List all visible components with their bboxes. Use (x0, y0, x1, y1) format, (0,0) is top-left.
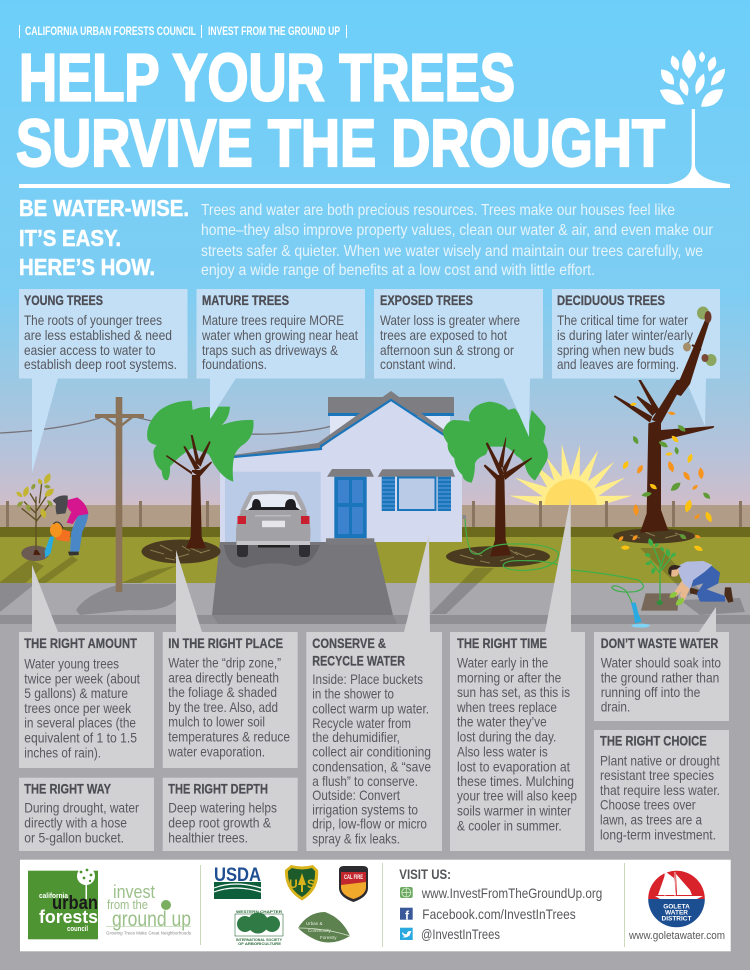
woman (45, 495, 88, 558)
body: temperatures & reduce (168, 729, 290, 745)
man (668, 561, 733, 607)
body: long-term investment. (600, 826, 716, 842)
body (601, 654, 721, 715)
body: collect warm up water. (312, 700, 429, 716)
body: traps such as driveways & (202, 342, 339, 358)
body: equivalent of 1 to 1.5 (24, 729, 137, 745)
scene: exposed tree (443, 402, 548, 557)
body (24, 656, 140, 760)
foliage (147, 401, 254, 482)
subheading (19, 195, 189, 280)
heading: VISIT US: (399, 866, 451, 882)
footer panel (20, 860, 731, 951)
title: HELP YOUR TREES (19, 40, 515, 116)
body: in the shower to (312, 686, 394, 702)
scene: garden hose and spigot (463, 515, 643, 604)
top label (19, 25, 347, 38)
body: a flush” to conserve. (312, 773, 418, 789)
logo: California Urban Forests Council: california (39, 893, 68, 900)
trunk (484, 437, 532, 557)
scene: deciduous tree (614, 380, 714, 552)
logo: Western Chapter ISA (235, 910, 283, 946)
heading: RECYCLE WATER (312, 653, 405, 668)
body: the dehumidifier, (312, 729, 400, 745)
body: resistant tree species (600, 767, 714, 783)
logo: Western Chapter ISA: INTERNATIONAL SOCIETY (236, 938, 283, 942)
body: 5 gallons) & mature (24, 685, 128, 701)
panel: mature trees (196, 289, 365, 419)
body: During drought, water (24, 800, 139, 816)
logo: Western Chapter ISA: WESTERN CHAPTER (236, 910, 283, 914)
logo: Cal Fire (339, 866, 368, 902)
logo: Forest Service shield (285, 865, 318, 900)
body: inches of rain). (24, 744, 101, 760)
panel: the right time (450, 497, 585, 851)
body (201, 312, 358, 372)
body: Water early in the (457, 654, 548, 670)
logo: Forest Service shield: S (307, 877, 315, 891)
scene: sidewalk and curb (0, 583, 750, 970)
logo: Invest from the Ground Up (106, 882, 192, 936)
logo: USDA (214, 865, 261, 899)
pointer (32, 378, 58, 473)
scene: ground shadows (0, 548, 745, 615)
car shadow (224, 545, 320, 568)
icon: deciduous branch with buds overlapping panel (669, 306, 716, 396)
body: or 5-gallon bucket. (24, 829, 124, 845)
body: the water they’ve (457, 714, 547, 730)
body: water when growing near heat (201, 327, 358, 343)
heading: THE RIGHT TIME (457, 636, 547, 651)
body: are less established & need (24, 327, 172, 343)
scene: driveway (212, 540, 397, 624)
window with shutters (378, 469, 455, 511)
scene: house (220, 391, 462, 545)
intro paragraph: Trees and water are both precious resources. Trees make our houses feel like (201, 202, 675, 219)
scene: sun (510, 444, 632, 505)
heading: THE RIGHT DEPTH (168, 781, 268, 796)
body: area directly beneath (168, 669, 279, 685)
panel: conserve and recycle water (306, 533, 442, 851)
body: lost during the day. (457, 729, 556, 745)
body: and leaves are forming. (557, 356, 679, 372)
pointer (210, 378, 236, 419)
top label: CALIFORNIA URBAN FORESTS COUNCIL (25, 26, 196, 38)
body: Water loss is greater where (380, 312, 520, 328)
body: establish deep root systems. (24, 356, 177, 372)
scene: fence (0, 501, 750, 530)
heading: THE RIGHT CHOICE (600, 734, 707, 749)
body: mulch to lower soil (168, 714, 265, 730)
falling leaves (621, 402, 714, 552)
tail lights (238, 516, 310, 524)
cabin (240, 491, 307, 512)
body: lost to evaporation at (457, 758, 570, 774)
logo: Goleta Water District (628, 868, 725, 942)
logo: USDA: USDA (214, 865, 261, 886)
trunk and lower branches (614, 380, 714, 533)
body: morning or after the (457, 669, 561, 685)
body: condensation, & “save (312, 758, 431, 774)
body (456, 654, 577, 833)
body (168, 800, 277, 845)
body: the foliage & shaded (168, 684, 277, 700)
heading: IN THE RIGHT PLACE (168, 636, 283, 651)
logo: Cal Fire: CAL FIRE (344, 875, 363, 881)
body: Recycle water from (312, 715, 411, 731)
scene: mature tree mulch (142, 540, 220, 564)
body: Water the “drip zone,” (168, 654, 281, 670)
body: Also less water is (457, 743, 548, 759)
panel: in the right place (163, 550, 298, 768)
sapling (15, 472, 56, 555)
logo: Goleta Water District: GOLETA (663, 903, 690, 910)
logo: California Urban Forests Council: urban (52, 893, 98, 914)
logo: Urban and Community Forestry leaf (298, 912, 350, 943)
body: Inside: Place buckets (312, 671, 423, 687)
pointer (32, 565, 58, 632)
garage opening (225, 472, 321, 542)
body: & cooler in summer. (457, 817, 562, 833)
panel: exposed trees (374, 289, 543, 437)
tree base (21, 546, 49, 561)
icon: facebook (400, 908, 413, 922)
body: easier access to water to (24, 342, 156, 358)
logo: Urban and Community Forestry leaf: Urban & (306, 921, 323, 926)
scene: sapling and man planting (641, 537, 733, 611)
heading: DECIDUOUS TREES (557, 293, 665, 308)
body: Choose trees over (600, 797, 696, 813)
visit us block (399, 866, 602, 942)
body (24, 800, 139, 845)
front door (326, 469, 374, 545)
body: healthier trees. (168, 829, 248, 845)
title (16, 40, 665, 181)
body: collect air conditioning (312, 744, 431, 760)
back roof (328, 397, 454, 455)
body: by the tree. Also, add (168, 699, 278, 715)
body: spring when new buds (557, 342, 674, 358)
heading: THE RIGHT AMOUNT (24, 636, 138, 651)
scene: running water and puddle (631, 603, 650, 628)
license plate (262, 521, 285, 527)
top label: INVEST FROM THE GROUND UP (208, 26, 340, 38)
facebook url: Facebook.com/InvestInTrees (422, 906, 576, 922)
body: The roots of younger trees (24, 312, 162, 328)
icon: twitter (400, 928, 413, 940)
scene: utility wires (0, 417, 332, 434)
subheading: BE WATER-WISE. (19, 195, 189, 221)
body: directly with a hose (24, 815, 127, 831)
walls (220, 401, 462, 542)
panel: don't waste water (594, 607, 729, 721)
panel: the right choice (594, 730, 729, 851)
website: www.InvestFromTheGroundUp.org (421, 885, 602, 901)
body: deep root growth & (168, 815, 272, 831)
pointer (545, 497, 571, 632)
gable roof (233, 391, 447, 457)
body: Water should soak into (601, 654, 721, 670)
icon: white tree logo and rule (19, 50, 730, 188)
scene: young tree with woman watering (15, 472, 88, 561)
body: trees are exposed to hot (380, 327, 507, 343)
logo: Invest from the Ground Up: Growing Trees Make Great Neighborhoods (106, 930, 192, 936)
heading: THE RIGHT WAY (24, 781, 111, 796)
logo: Urban and Community Forestry leaf: Forestry (320, 935, 337, 940)
scene: deciduous tree mulch (613, 528, 695, 544)
scene: utility pole (95, 397, 144, 592)
logo: Goleta Water District: www.goletawater.com (628, 930, 725, 942)
heading: MATURE TREES (202, 293, 289, 308)
panel: the right way (19, 778, 154, 851)
panel: deciduous trees (552, 289, 720, 426)
body: irrigation systems to (312, 802, 418, 818)
body: in several places (the (24, 715, 136, 731)
intro paragraph (201, 202, 714, 279)
icon: globe (400, 887, 413, 898)
panel: the right amount (19, 565, 154, 768)
body: constant wind. (380, 356, 456, 372)
intro paragraph: enjoy a wide range of benefits at a low cost and with little effort. (201, 262, 595, 279)
pointer (685, 378, 706, 426)
body (236, 510, 310, 545)
pointer (176, 550, 202, 632)
body: your tree will also keep (457, 788, 577, 804)
trunk (166, 435, 212, 548)
subheading: HERE’S HOW. (19, 254, 155, 280)
heading (312, 636, 405, 668)
logo: California Urban Forests Council: forests (39, 907, 98, 927)
body: The critical time for water (557, 312, 688, 328)
scene: mature tree (147, 401, 254, 548)
wheels (237, 538, 310, 557)
sapling (644, 537, 677, 605)
body: Mature trees require MORE (202, 312, 344, 328)
body: lawn, as trees are a (600, 811, 702, 827)
panel: the right depth (163, 778, 298, 851)
body: foundations. (202, 356, 267, 372)
body: twice per week (about (24, 670, 140, 686)
heading: YOUNG TREES (24, 293, 103, 308)
heading: DON’T WASTE WATER (601, 636, 718, 651)
logo: Invest from the Ground Up: from the (107, 898, 148, 912)
body: trees once per week (24, 700, 132, 716)
body: spray & fix leaks. (312, 830, 400, 846)
scene: exposed tree mulch (446, 546, 550, 567)
body: when trees replace (456, 699, 557, 715)
logo: Western Chapter ISA: OF ARBORICULTURE (238, 942, 281, 946)
body (167, 654, 290, 759)
pointer (404, 533, 430, 632)
logo: Invest from the Ground Up: ground up (112, 908, 191, 931)
twitter handle: @InvestInTrees (421, 926, 500, 942)
pointer (503, 378, 530, 437)
body: that require less water. (600, 782, 720, 798)
logo: Goleta Water District: WATER (665, 910, 688, 916)
scene: lawn (0, 527, 750, 583)
tree square (641, 593, 678, 611)
foliage (443, 402, 548, 483)
body: these times. Mulching (457, 773, 574, 789)
body: the ground rather than (601, 669, 719, 685)
body: is during later winter/early (557, 327, 693, 343)
scene: car (224, 491, 320, 568)
logo: California Urban Forests Council (28, 867, 98, 939)
logo: Invest from the Ground Up: invest (113, 882, 155, 902)
body: running off into the (601, 684, 700, 700)
body (24, 312, 177, 372)
body: afternoon sun & strong or (380, 342, 514, 358)
body: drip, low-flow or micro (312, 816, 427, 832)
body (312, 671, 431, 846)
heading: EXPOSED TREES (380, 293, 473, 308)
body (600, 752, 720, 842)
icon: facebook: f (405, 908, 410, 922)
heading: CONSERVE & (312, 636, 386, 651)
subheading: IT’S EASY. (19, 225, 121, 251)
logo: California Urban Forests Council: council (67, 926, 88, 933)
body: sun has set, as this is (457, 684, 570, 700)
pointer (699, 607, 716, 632)
body: Deep watering helps (168, 800, 277, 816)
body: water evaporation. (167, 743, 265, 759)
body: Outside: Convert (312, 787, 400, 803)
body (557, 312, 693, 372)
logo: Goleta Water District: DISTRICT (662, 916, 692, 923)
panel: young trees (19, 289, 188, 473)
logo: Urban and Community Forestry leaf: Community (308, 928, 332, 933)
body: soils warmer in winter (457, 803, 571, 819)
logo: Forest Service shield: U (289, 877, 298, 891)
body: Plant native or drought (600, 752, 720, 768)
body: drain. (601, 699, 630, 715)
body (380, 312, 520, 372)
body: Water young trees (24, 656, 119, 672)
